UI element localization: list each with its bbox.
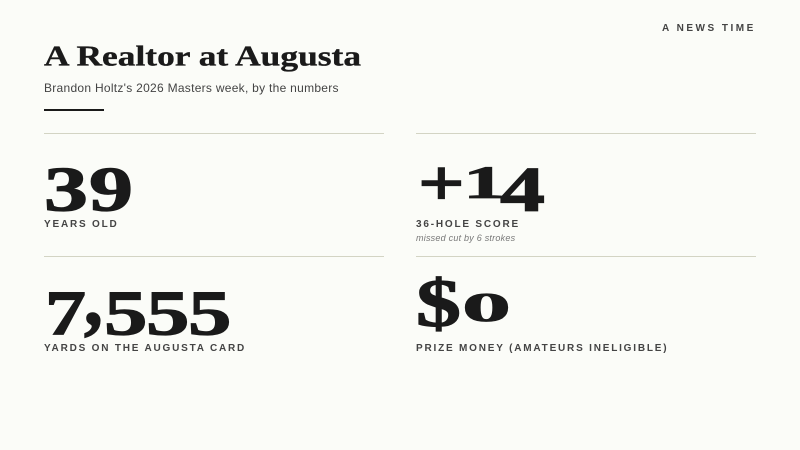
stat: 7,555 yards [44,254,246,354]
stat: 7,555 yards: YARDS ON THE AUGUSTA CARD [44,343,246,354]
stat: +14 36-hole score: + [418,147,465,220]
stat: 7,555 yards: 5 [146,278,190,349]
brand label: A NEWS TIME [662,23,756,34]
stat: 39 years old [44,153,133,230]
stat: 7,555 yards: 5 [188,278,232,349]
stat: 7,555 yards: , [84,254,103,343]
stat: 39 years old: 3 [44,153,88,225]
stat: 39 years old: YEARS OLD [44,219,119,230]
stat: +14 36-hole score: missed cut by 6 strokes [416,233,516,243]
title: A Realtor at Augusta [44,40,361,72]
title accent rule [44,109,104,111]
stat: 39 years old: 9 [89,153,133,225]
stat: +14 36-hole score: 1 [463,156,506,208]
stat: $0 prize money [416,266,668,354]
stat: 7,555 yards: 7 [45,277,86,348]
stat: +14 36-hole score [416,147,545,243]
subtitle: Brandon Holtz's 2026 Masters week, by the numbers [44,81,339,95]
stat: 7,555 yards: 5 [104,278,148,349]
stat: $0 prize money: 0 [462,285,511,330]
stat: $0 prize money: $ [416,266,461,341]
stat: +14 36-hole score: 36-HOLE SCORE [416,219,520,230]
stat: +14 36-hole score: 4 [500,153,545,224]
stat: $0 prize money: PRIZE MONEY (AMATEURS INELIGIBLE) [416,343,668,354]
